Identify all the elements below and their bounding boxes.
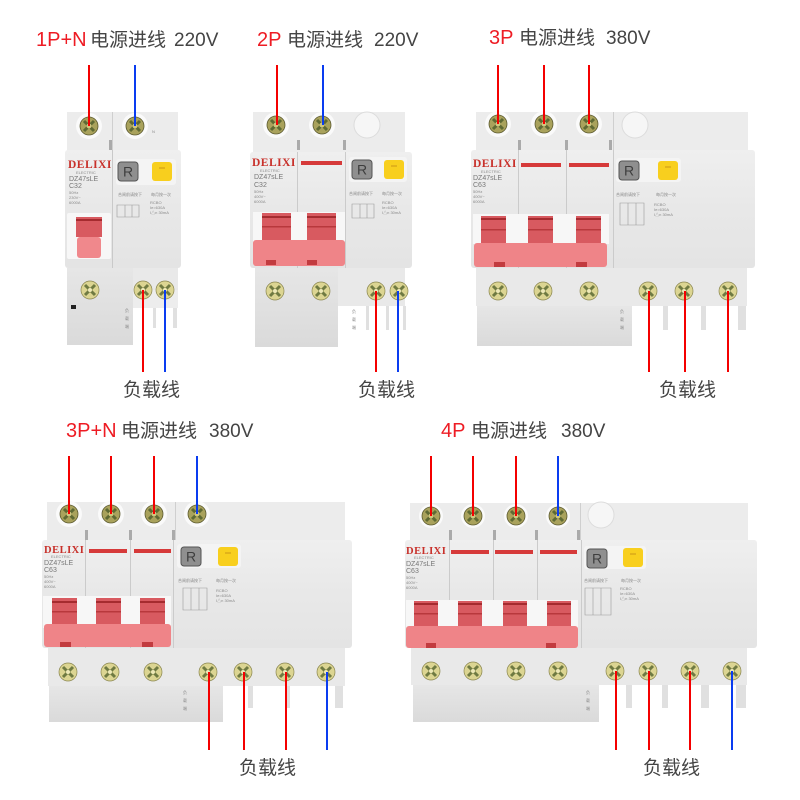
breaker: 1P+N: 载 [125,315,129,321]
breaker: 3P: 50Hz [473,189,482,194]
breaker: 3P+N: I△n 30mA [216,597,235,603]
breaker: 3P+N: ELECTRIC [51,554,71,559]
breaker: 4P [405,456,757,750]
breaker: 3P+N: 端 [183,705,187,711]
breaker: 3P+N: 400V~ [44,579,56,584]
label: load wire 2: 负载线 [358,379,415,401]
label: load wire 5: 负载线 [643,757,700,779]
breaker: 4P: DELIXI [406,546,446,557]
title: 1P+N: 1P+N [36,29,87,51]
title: 3P+N: 380V [209,421,254,442]
breaker: 2P: ELECTRIC [260,168,280,173]
breaker: 1P+N: DELIXI [68,159,112,171]
breaker: 2P: 6000A [254,199,266,204]
title: 3P: 380V [606,28,651,49]
breaker: 4P: RCBO [620,586,632,591]
breaker: 1P+N: 50Hz [69,190,78,195]
breaker: 3P: C63 [473,182,486,189]
breaker: 2P: I△n 30mA [382,209,401,215]
breaker: 3P: 6000A [473,199,485,204]
breaker: 4P: C63 [406,568,419,575]
breaker: 3P: 端 [620,324,624,330]
breaker: 4P: 50Hz [406,575,415,580]
breaker: 2P: 每月按一次 [382,190,402,196]
breaker: 3P: 400V~ [473,194,485,199]
breaker: 3P: Ie=630A [654,207,669,212]
label: load wire 1: 负载线 [123,379,180,401]
breaker: 3P+N: RCBO [216,588,228,593]
breaker: 4P: 6000A [406,585,418,590]
breaker: 2P: 合闸前请按下 [349,190,373,196]
breaker: 3P+N: 载 [183,697,187,703]
breaker: 3P: 合闸前请按下 [616,191,640,197]
breaker: 3P: ELECTRIC [481,169,501,174]
breaker: 1P+N: 每月按一次 [151,191,171,197]
title: 4P [441,420,606,442]
breaker: 3P+N: 合闸前请按下 [178,577,202,583]
breaker: 1P+N: RCBO [150,200,162,205]
breaker: 1P+N: DZ47sLE [69,176,99,183]
breaker: 4P: I△n 30mA [620,595,639,601]
breaker: 3P: 载 [620,316,624,322]
title: 2P [257,29,419,51]
title: 1P+N: 220V [174,30,219,51]
breaker: 2P: DELIXI [252,157,296,169]
breaker: 3P+N: 每月按一次 [216,577,236,583]
title: 3P: 3P [489,27,513,49]
title: 2P: 电源进线 [287,29,363,51]
breaker: 3P: DELIXI [473,158,517,170]
title: 4P: 380V [561,421,606,442]
breaker: 4P: 载 [586,697,590,703]
breaker: 3P: I△n 30mA [654,211,673,217]
title: 1P+N [36,29,219,51]
breaker: 3P: 负 [620,308,624,314]
breaker: 1P+N: ELECTRIC [76,170,96,175]
breaker: 4P: 每月按一次 [621,577,641,583]
breaker: 1P+N [65,65,181,372]
title: 3P+N: 3P+N [66,420,117,442]
breaker: 2P: 载 [352,316,356,322]
breaker: 3P+N: 6000A [44,584,56,589]
breaker: 3P [471,65,755,372]
breaker: 4P: 负 [586,689,590,695]
breaker: 3P+N: Ie=630A [216,593,231,598]
breaker: 1P+N: 230V~ [69,195,81,200]
breaker: 3P: DZ47sLE [473,175,503,182]
breaker: 1P+N: 负 [125,307,129,313]
title: 2P: 2P [257,29,281,51]
title: 3P: 电源进线 [519,27,595,49]
breaker: 1P+N: 6000A [69,200,81,205]
title: 4P: 电源进线 [471,420,547,442]
label: load wire 4: 负载线 [239,757,296,779]
breaker: 3P: RCBO [654,202,666,207]
breaker: 3P+N: C63 [44,567,57,574]
breaker: 4P: ELECTRIC [414,555,434,560]
title: 3P [489,27,651,49]
breaker: 4P: DZ47sLE [406,561,436,568]
breaker: 2P [250,65,412,372]
title: 4P: 4P [441,420,465,442]
breaker: 3P+N: DELIXI [44,545,84,556]
title: 2P: 220V [374,30,419,51]
breaker: 3P+N: DZ47sLE [44,560,74,567]
breaker: 4P: 合闸前请按下 [584,577,608,583]
title: 3P+N [66,420,254,442]
label: load wire 3: 负载线 [659,379,716,401]
breaker: 1P+N: 端 [125,323,129,329]
title: 3P+N: 电源进线 [121,420,197,442]
breaker: 3P+N [42,456,352,750]
breaker: 1P+N: Ie=630A [150,205,165,210]
breaker: 3P: 每月按一次 [656,191,676,197]
breaker: 1P+N: I△n 30mA [150,209,169,215]
breaker: 1P+N: C32 [69,183,82,190]
breaker: 1P+N: N [152,129,155,134]
breaker: 2P: C32 [254,182,267,189]
breaker: 1P+N: 合闸前请按下 [118,191,142,197]
breaker: 4P: Ie=630A [620,591,635,596]
breaker: 3P+N: 负 [183,689,187,695]
breaker: 4P: 400V~ [406,580,418,585]
breaker: 2P: 端 [352,324,356,330]
breaker: 2P: 负 [352,308,356,314]
breaker: 4P: 端 [586,705,590,711]
breaker: 2P: RCBO [382,200,394,205]
breaker: 2P: Ie=630A [382,205,397,210]
breaker: 2P: 400V~ [254,194,266,199]
title: 1P+N: 电源进线 [90,29,166,51]
breaker: 2P: 50Hz [254,189,263,194]
breaker: 2P: DZ47sLE [254,174,284,181]
breaker: 3P+N: 50Hz [44,574,53,579]
